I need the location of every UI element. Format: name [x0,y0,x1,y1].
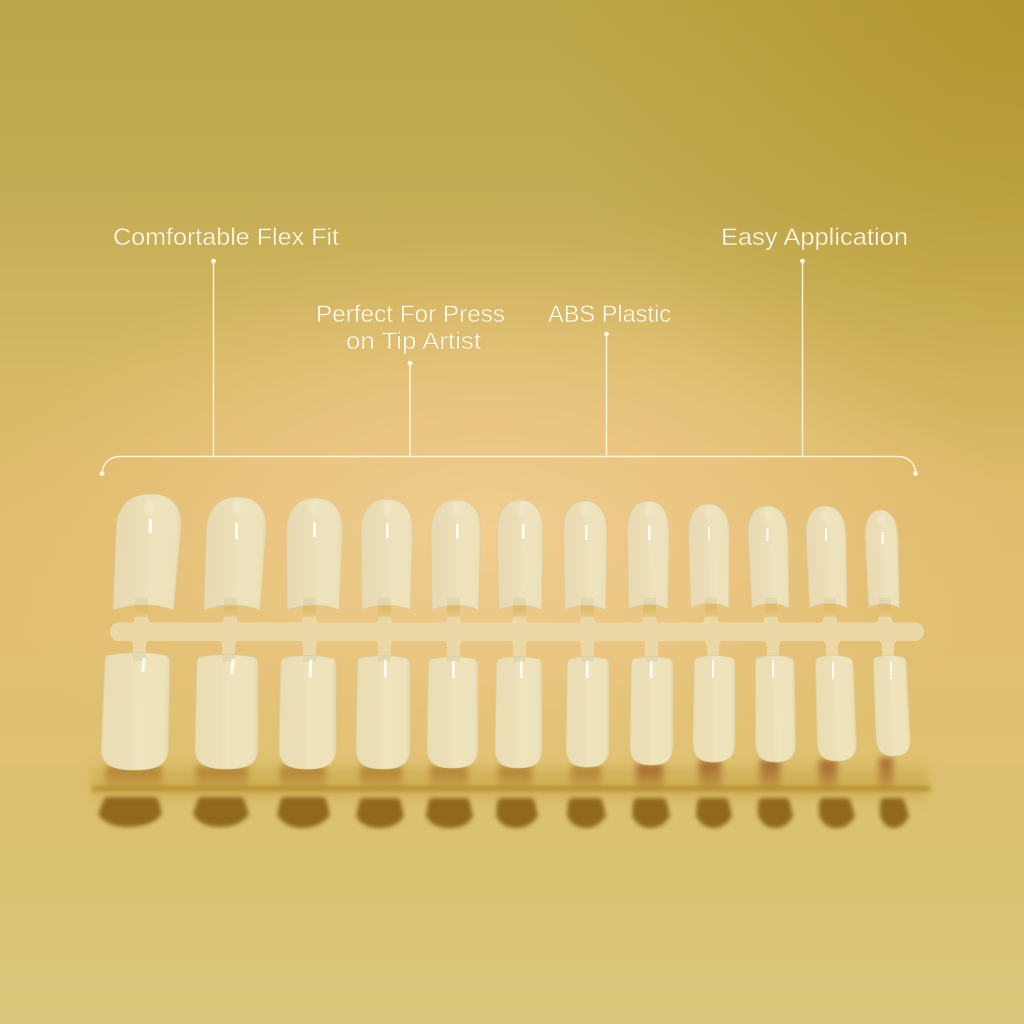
top row of nail tips [112,494,901,610]
bottom row of nail tips [101,653,911,770]
label: Perfect For Press on Tip Artist: Perfect For Press [316,301,505,328]
label: Comfortable Flex Fit: Comfortable Flex Fit [113,224,339,251]
floor shadows of the nails [92,758,930,828]
soft reflections near nail tops [145,498,884,525]
attachment tabs showing through the nails [133,598,891,662]
label: Perfect For Press on Tip Artist: on Tip Artist [346,328,481,355]
leader lines with dots [211,259,805,456]
label: Perfect For Press on Tip Artist [316,301,505,355]
callout labels and leader lines [113,224,908,456]
label: ABS Plastic: ABS Plastic [548,301,671,328]
bracket spanning the nail set [100,456,918,476]
glossy highlights on nails [141,519,892,679]
nail tip sprue runner [110,602,924,661]
label: Easy Application: Easy Application [721,224,908,251]
